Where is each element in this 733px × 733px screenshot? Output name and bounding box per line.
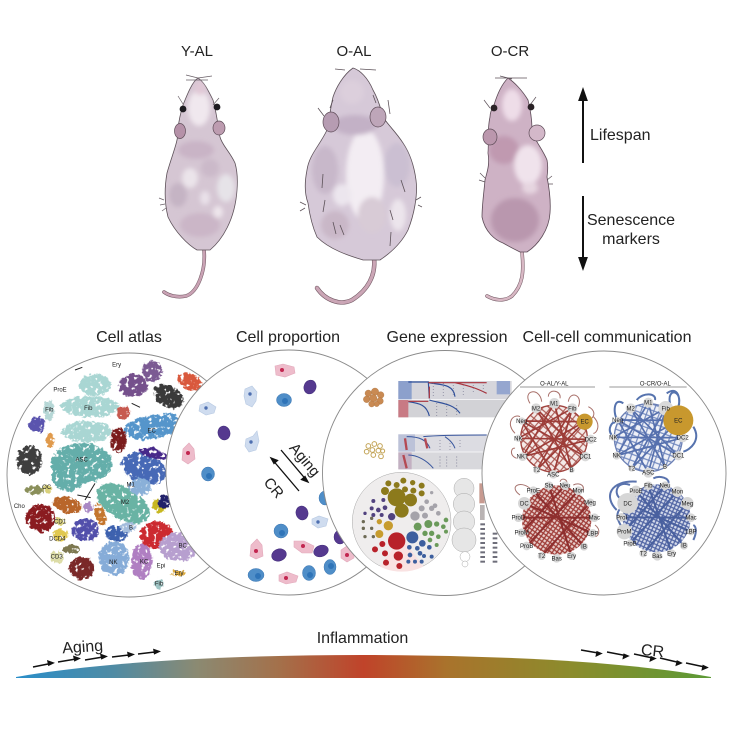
label: CR: CR — [260, 474, 287, 502]
UMAP clusters: Fib — [45, 408, 54, 414]
label: Aging: Aging — [286, 440, 323, 480]
network: O-CR/O-AL upper: NK — [613, 454, 621, 460]
network: O-AL/Y-AL lower: ProE — [527, 489, 540, 495]
heading: Cell proportion: Cell proportion — [236, 329, 340, 346]
label: Inflammation: Inflammation — [317, 630, 408, 647]
network: O-AL/Y-AL upper: M1 — [550, 401, 559, 407]
network: O-AL/Y-AL upper: M2 — [532, 406, 541, 412]
UMAP clusters: Ery — [175, 571, 183, 577]
icon: cell cluster lower — [364, 442, 385, 459]
network: O-CR/O-AL lower: T2 — [640, 551, 647, 557]
pale blue cells — [199, 386, 328, 528]
chart: gene dot columns — [479, 483, 497, 563]
UMAP clusters: DCD4 — [49, 537, 66, 543]
label: Senescence markers — [587, 212, 675, 248]
UMAP clusters: KC — [140, 559, 149, 565]
network: O-CR/O-AL lower: Ery — [667, 551, 676, 557]
header: O-AL/Y-AL: O-AL/Y-AL — [540, 382, 569, 388]
network: O-CR/O-AL lower — [610, 477, 697, 561]
arrows: CR direction — [581, 650, 707, 670]
network: O-AL/Y-AL upper: T2 — [533, 468, 541, 474]
network: O-CR/O-AL lower: Fib — [644, 484, 653, 490]
UMAP clusters: EC — [148, 429, 156, 435]
heading: Cell atlas: Cell atlas — [96, 329, 162, 346]
label: Senescence markers: Senescence — [587, 212, 675, 229]
heading: Cell-cell communication: Cell-cell communication — [523, 329, 691, 346]
UMAP clusters: Epi — [157, 563, 165, 569]
network: O-AL/Y-AL lower: ProM — [515, 531, 529, 537]
purple cells — [216, 378, 346, 563]
network: O-AL/Y-AL lower: IB — [581, 545, 587, 551]
network: O-CR/O-AL lower: LBP — [685, 530, 697, 536]
network: O-CR/O-AL lower: Neu — [660, 484, 670, 490]
UMAP clusters: CD1 — [54, 520, 67, 526]
heatmap upper — [398, 381, 512, 417]
UMAP clusters: M2 — [121, 500, 130, 506]
arrow: lifespan up — [580, 90, 586, 163]
label: Y-AL: Y-AL — [181, 43, 213, 60]
heatmap lower — [398, 434, 488, 469]
label: CR timeline: CR — [640, 642, 665, 661]
UMAP clusters: M1 — [127, 483, 135, 489]
network: O-CR/O-AL upper: M1 — [644, 401, 653, 407]
chart: inflammation gradient dome — [16, 655, 711, 678]
panel: cell proportion — [166, 350, 411, 595]
UMAP clusters: BC — [179, 543, 187, 549]
arrow: CR — [271, 458, 299, 491]
network: O-CR/O-AL upper: NK — [609, 435, 617, 441]
network: O-AL/Y-AL lower: T2 — [538, 554, 546, 560]
network: O-CR/O-AL lower: Meg — [682, 501, 693, 507]
network: O-AL/Y-AL lower: ProB — [520, 544, 533, 550]
network: O-CR/O-AL lower: Bas — [652, 554, 662, 560]
UMAP clusters: OC — [42, 485, 52, 491]
UMAP clusters: Fib — [155, 582, 164, 588]
network: O-AL/Y-AL lower: Bas — [552, 556, 562, 562]
UMAP clusters: Fib — [84, 406, 93, 412]
network: O-AL/Y-AL lower: ProD — [512, 516, 526, 522]
label: Aging timeline: Aging — [62, 638, 104, 657]
UMAP clusters: ProE — [53, 387, 67, 393]
icon: cell cluster upper — [363, 388, 384, 407]
label: Lifespan: Lifespan — [590, 127, 650, 144]
network: O-AL/Y-AL lower: Mac — [589, 516, 600, 522]
network: O-CR/O-AL lower: IB — [681, 544, 687, 550]
header: O-AL/Y-AL — [520, 382, 595, 388]
network: O-CR/O-AL lower: ProI — [616, 515, 627, 521]
header: O-CR/O-AL — [609, 382, 687, 388]
panel: cell-cell communication — [482, 351, 726, 595]
pink cells — [182, 364, 354, 584]
network: O-AL/Y-AL lower: Neu — [560, 484, 570, 490]
network: O-AL/Y-AL lower: Meg — [584, 501, 596, 507]
network: O-AL/Y-AL lower: Sta — [545, 484, 554, 490]
network: O-CR/O-AL upper: DC1 — [672, 454, 685, 460]
UMAP clusters — [14, 360, 205, 589]
heading: Gene expression: Gene expression — [387, 329, 507, 346]
network: O-AL/Y-AL upper: ASC — [547, 472, 560, 478]
arrow: aging — [281, 450, 308, 482]
network: O-CR/O-AL lower: ProB — [623, 541, 637, 547]
network: O-AL/Y-AL upper: B — [570, 468, 574, 474]
network: O-AL/Y-AL lower: Ery — [567, 554, 576, 560]
mouse: O-AL — [300, 68, 422, 302]
network: O-AL/Y-AL upper: DC2 — [585, 437, 597, 443]
panel: cell atlas — [7, 353, 251, 597]
blue cells — [202, 394, 336, 582]
chart: gene bubble plot — [352, 472, 451, 572]
mouse: O-CR — [479, 76, 553, 300]
panel: gene expression — [322, 350, 568, 596]
network: O-CR/O-AL upper: Neg — [612, 418, 623, 424]
network: O-CR/O-AL lower: ProE — [629, 489, 643, 495]
UMAP clusters: CD3 — [51, 555, 63, 561]
UMAP clusters: Ery — [112, 363, 121, 369]
UMAP clusters: B — [129, 525, 133, 531]
network: O-CR/O-AL lower: ProM — [617, 530, 631, 536]
network: O-AL/Y-AL upper: Fib — [568, 406, 577, 412]
mouse: Y-AL — [159, 75, 237, 297]
network: O-CR/O-AL upper: M2 — [627, 406, 635, 412]
network: O-CR/O-AL lower: Mac — [685, 516, 697, 522]
network: O-AL/Y-AL upper — [510, 391, 598, 479]
UMAP clusters: NK — [109, 560, 117, 566]
network: O-CR/O-AL upper: T2 — [628, 466, 636, 472]
label: Senescence markers: markers — [602, 231, 660, 248]
header: O-CR/O-AL: O-CR/O-AL — [640, 382, 671, 388]
network: O-CR/O-AL upper — [609, 391, 696, 478]
network: O-AL/Y-AL lower: DC — [520, 501, 529, 507]
network: O-CR/O-AL lower: DC — [623, 501, 633, 507]
network: O-AL/Y-AL upper: EC — [581, 420, 589, 426]
UMAP clusters: Cho — [14, 504, 25, 510]
network: O-AL/Y-AL lower: Mon — [573, 489, 584, 495]
chart: side bubbles — [452, 478, 476, 567]
network: O-CR/O-AL upper: Fib — [662, 406, 670, 412]
network: O-CR/O-AL lower: Mon — [672, 490, 683, 496]
network: O-AL/Y-AL upper: Neg — [516, 419, 527, 425]
network: O-AL/Y-AL upper: DC1 — [579, 455, 592, 461]
label: O-CR: O-CR — [491, 43, 529, 60]
network: O-CR/O-AL upper: B — [663, 465, 667, 471]
arrows: aging direction — [33, 650, 159, 667]
arrow: senescence markers down — [580, 196, 586, 268]
UMAP clusters: ASC — [76, 458, 88, 464]
network: O-CR/O-AL upper: ASC — [642, 471, 655, 477]
network: O-CR/O-AL upper: DC2 — [677, 436, 689, 442]
network: O-CR/O-AL upper: EC — [674, 418, 683, 424]
network: O-AL/Y-AL lower: LBP — [587, 531, 598, 537]
network: O-AL/Y-AL upper: NKT — [517, 455, 529, 461]
network: O-AL/Y-AL upper: NK — [514, 436, 522, 442]
label: O-AL: O-AL — [336, 43, 372, 60]
network: O-AL/Y-AL lower — [512, 479, 600, 563]
